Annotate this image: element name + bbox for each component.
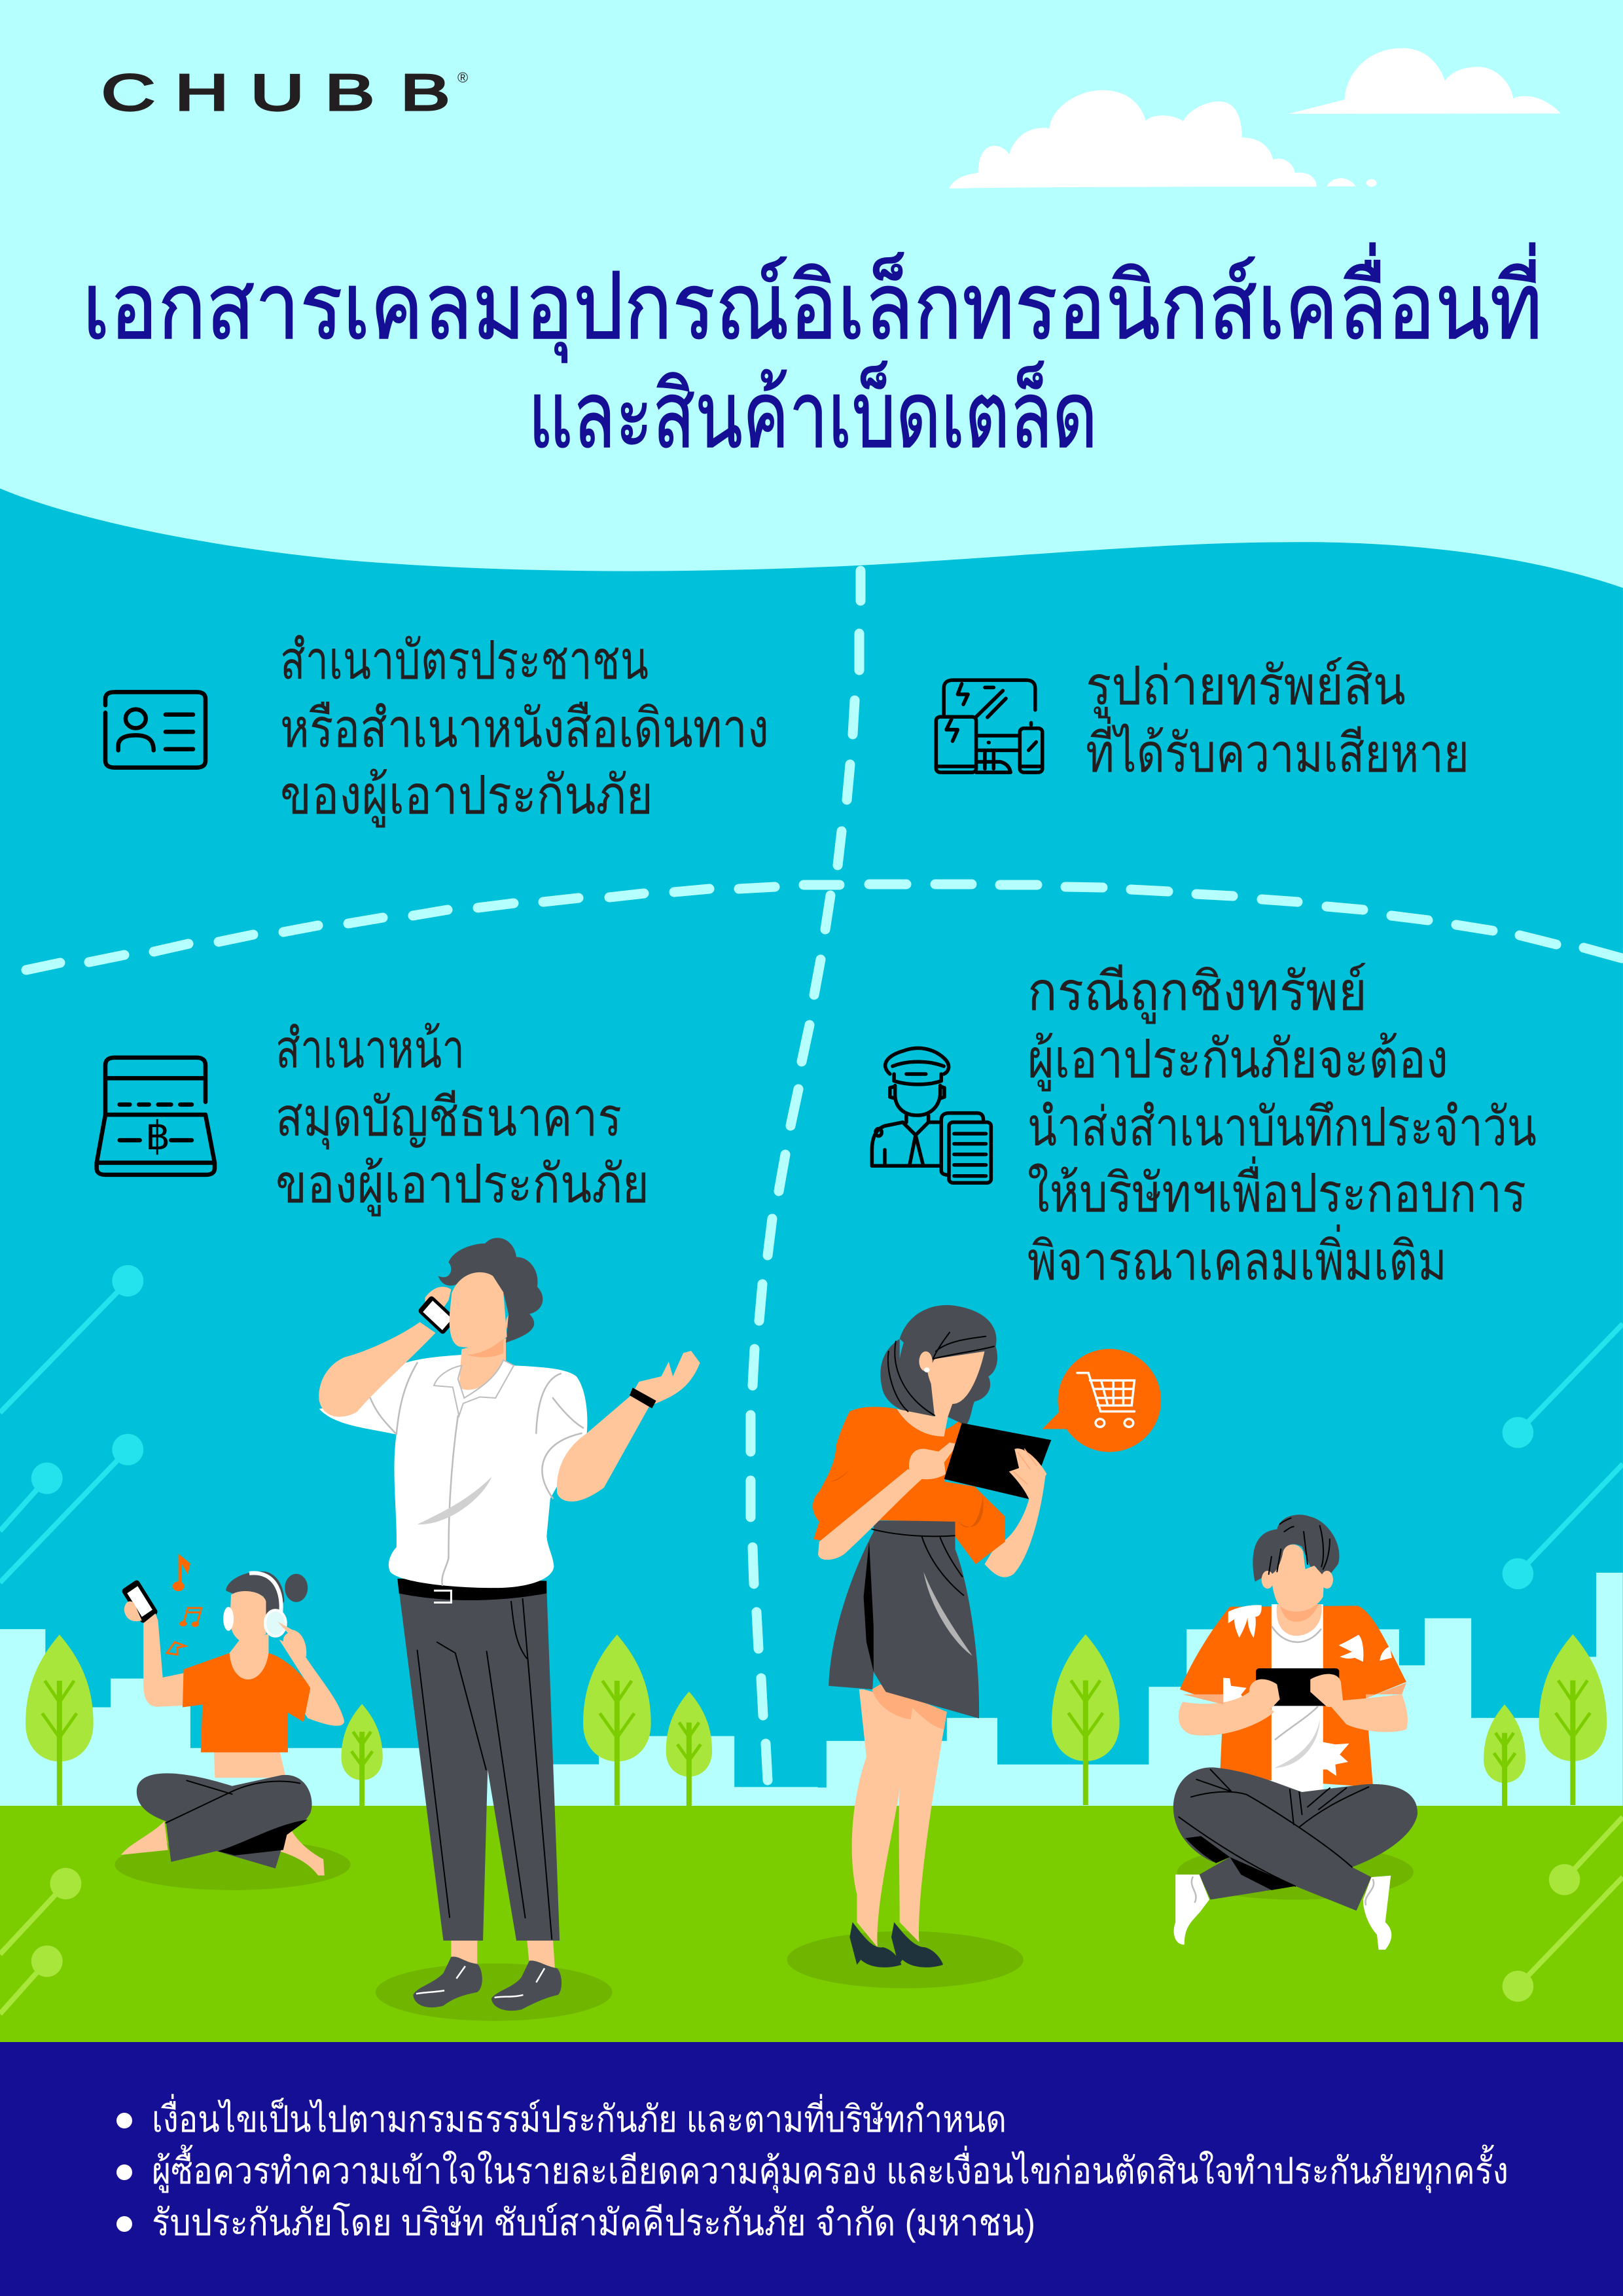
teal wave background [0, 488, 1623, 2066]
text block: robbery report copy: กรณีถูกชิงทรัพย์ [1027, 962, 1367, 1024]
logo: Chubb: CHUBB [101, 64, 450, 121]
text block: bank book copy: สำเนาหน้า [276, 1020, 465, 1079]
text block: ID card copy: หรือสำเนาหนังสือเดินทาง [280, 699, 769, 759]
figure: seated man with tablet [1173, 1515, 1418, 1950]
trees [26, 1634, 1607, 1810]
sky background [0, 0, 1623, 655]
text block: bank book copy [276, 1020, 649, 1216]
callout: shopping cart bubble [1043, 1349, 1161, 1452]
text block: photos of damage: ที่ได้รับความเสียหาย [1086, 716, 1469, 783]
clouds [949, 48, 1561, 188]
text block: ID card copy [280, 631, 769, 827]
figure: woman with headphones [115, 1554, 351, 1890]
skyline right [753, 1573, 1623, 1807]
title: และสินค้าเบ็ดเตล็ด [528, 360, 1097, 467]
dashed divider: horizontal [26, 884, 1622, 970]
figure: man on the phone [319, 1238, 700, 2021]
skyline left [0, 1629, 818, 1808]
text block: robbery report copy: ผู้เอาประกันภัยจะต้อง [1027, 1030, 1448, 1091]
title [82, 243, 1543, 467]
text block: photos of damage [1086, 656, 1469, 783]
icon: bank book [97, 1058, 215, 1175]
text block: bank book copy: ของผู้เอาประกันภัย [276, 1155, 649, 1216]
text block: photos of damage: รูปถ่ายทรัพย์สิน [1086, 656, 1406, 718]
icon: damaged devices [936, 680, 1043, 772]
bullet list: รับประกันภัยโดย บริษัท ชับบ์สามัคคีประกันภัย จำกัด (มหาชน) [152, 2202, 1035, 2243]
logo: Chubb: ® [457, 69, 468, 86]
icon: baht sign: ฿ [145, 1114, 170, 1158]
bullet list: เงื่อนไขเป็นไปตามกรมธรรม์ประกันภัย และตามที่บริษัทกำหนด [152, 2094, 1007, 2140]
circuit nodes right [1503, 1324, 1623, 2001]
text block: robbery report copy: พิจารณาเคลมเพิ่มเติม [1027, 1224, 1447, 1291]
icon: police officer with report [872, 1048, 991, 1183]
ground [0, 1806, 1623, 2042]
icon: ID card [105, 692, 205, 768]
text block: ID card copy: ของผู้เอาประกันภัย [280, 766, 653, 827]
dashed divider: vertical [751, 571, 861, 1780]
text block: robbery report copy: ให้บริษัทฯเพื่อประกอบการ [1027, 1156, 1526, 1223]
circuit nodes left [0, 1265, 143, 2014]
footer panel [0, 2042, 1623, 2296]
bullet list [116, 2094, 1508, 2243]
text block: ID card copy: สำเนาบัตรประชาชน [280, 631, 649, 691]
text block: bank book copy: สมุดบัญชีธนาคาร [276, 1088, 622, 1150]
text block: robbery report copy [1027, 962, 1537, 1291]
figure: woman with tablet [787, 1305, 1051, 1988]
